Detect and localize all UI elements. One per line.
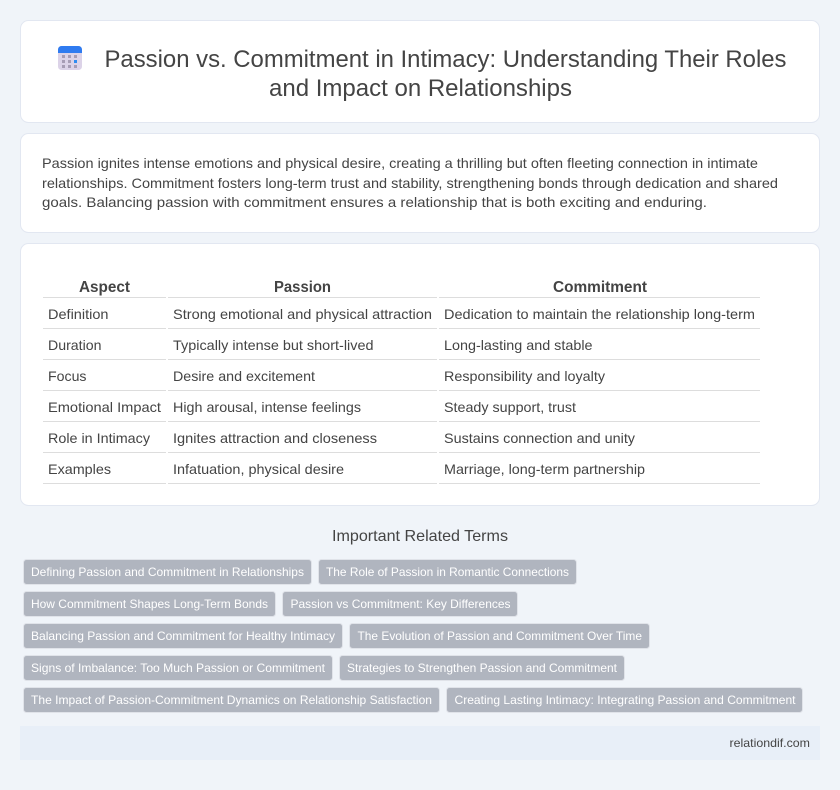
table row: Definition: Dedication to maintain the relationship long-term [444, 306, 755, 322]
table row: Definition: Strong emotional and physical attraction [173, 306, 432, 322]
tag [446, 688, 802, 712]
tag [282, 592, 518, 616]
tag: The Role of Passion in Romantic Connections [326, 565, 569, 579]
panel: introduction text [20, 134, 820, 232]
tag: How Commitment Shapes Long-Term Bonds [31, 597, 268, 611]
table row: Focus: Desire and excitement [173, 368, 315, 384]
table header: Passion [274, 279, 331, 296]
tag: The Evolution of Passion and Commitment Over Time [358, 629, 642, 643]
table row: Examples [48, 461, 645, 477]
text block: introduction: goals. Balancing passion with commitment ensures a relationship that is both exciting and enduring. [42, 194, 707, 210]
table header: Aspect [79, 279, 131, 296]
table row: Focus: Responsibility and loyalty [444, 368, 605, 384]
tag [24, 688, 440, 712]
tag [24, 656, 332, 680]
tag [24, 592, 276, 616]
table row: Duration: Typically intense but short-lived [173, 337, 374, 353]
panel: title header [20, 20, 820, 122]
table row: Definition: Definition [48, 306, 108, 322]
tag [350, 624, 650, 648]
table row: Role in Intimacy: Role in Intimacy [48, 430, 150, 446]
table row: Emotional Impact: Emotional Impact [48, 399, 161, 415]
text block: introduction: Passion ignites intense emotions and physical desire, creating a thrilling but often fleeting connection in intimate [42, 155, 758, 171]
table header [79, 279, 648, 296]
tag: Signs of Imbalance: Too Much Passion or Commitment [31, 661, 326, 675]
table row: Examples: Marriage, long-term partnership [444, 461, 645, 477]
heading: title: Passion vs. Commitment in Intimacy: Understanding Their Roles [104, 46, 786, 73]
related terms tags [24, 560, 802, 712]
footer [20, 726, 820, 760]
heading: title [104, 46, 786, 102]
table row: Focus [48, 368, 605, 384]
heading: title: and Impact on Relationships [269, 75, 572, 102]
heading: Important Related Terms: Important Related Terms [332, 528, 508, 545]
tag: Creating Lasting Intimacy: Integrating Passion and Commitment [454, 693, 796, 707]
tag: Defining Passion and Commitment in Relationships [31, 565, 304, 579]
table row: Role in Intimacy: Sustains connection and unity [444, 430, 635, 446]
table row: Definition [48, 306, 755, 322]
table row: Duration: Long-lasting and stable [444, 337, 593, 353]
footer: relationdif.com [730, 736, 810, 750]
tag: Passion vs Commitment: Key Differences [290, 597, 510, 611]
table header: Commitment [553, 279, 648, 296]
table row: Emotional Impact: Steady support, trust [444, 399, 576, 415]
table row: Emotional Impact: High arousal, intense feelings [173, 399, 361, 415]
table row: Duration [48, 337, 593, 353]
tag [318, 560, 576, 584]
tag: Balancing Passion and Commitment for Healthy Intimacy [31, 629, 335, 643]
icon: calendar [58, 46, 82, 70]
tag: The Impact of Passion-Commitment Dynamics on Relationship Satisfaction [31, 693, 432, 707]
panel: comparison table [20, 244, 820, 506]
table row: Emotional Impact [48, 399, 576, 415]
table row: Role in Intimacy: Ignites attraction and closeness [173, 430, 377, 446]
table row: Duration: Duration [48, 337, 102, 353]
table row: Role in Intimacy [48, 430, 635, 446]
tag [24, 624, 342, 648]
tag: Strategies to Strengthen Passion and Commitment [347, 661, 618, 675]
tag [340, 656, 624, 680]
text block: introduction [42, 155, 778, 210]
text block: introduction: relationships. Commitment fosters long-term trust and stability, strengthening bonds through dedication and shared [42, 175, 778, 191]
table row: Examples: Examples [48, 461, 111, 477]
tag [24, 560, 312, 584]
table row: Focus: Focus [48, 368, 86, 384]
table row: Examples: Infatuation, physical desire [173, 461, 344, 477]
